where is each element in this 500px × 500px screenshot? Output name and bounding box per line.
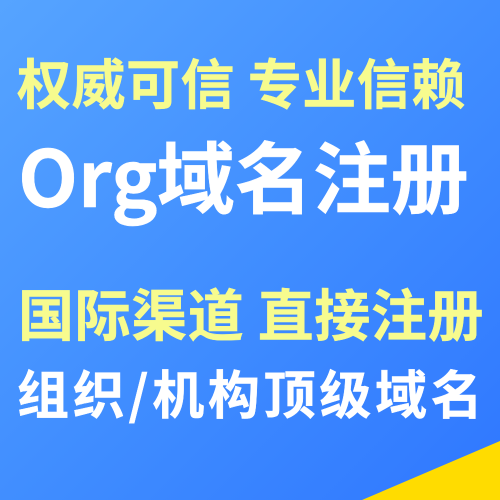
tagline: channel: 国际渠道 直接注册 — [18, 272, 484, 353]
main title: Org域名注册 — [18, 118, 469, 230]
subtitle: 组织/机构顶级域名 — [17, 354, 486, 429]
tagline: trust: 权威可信 专业信赖 — [17, 41, 466, 120]
